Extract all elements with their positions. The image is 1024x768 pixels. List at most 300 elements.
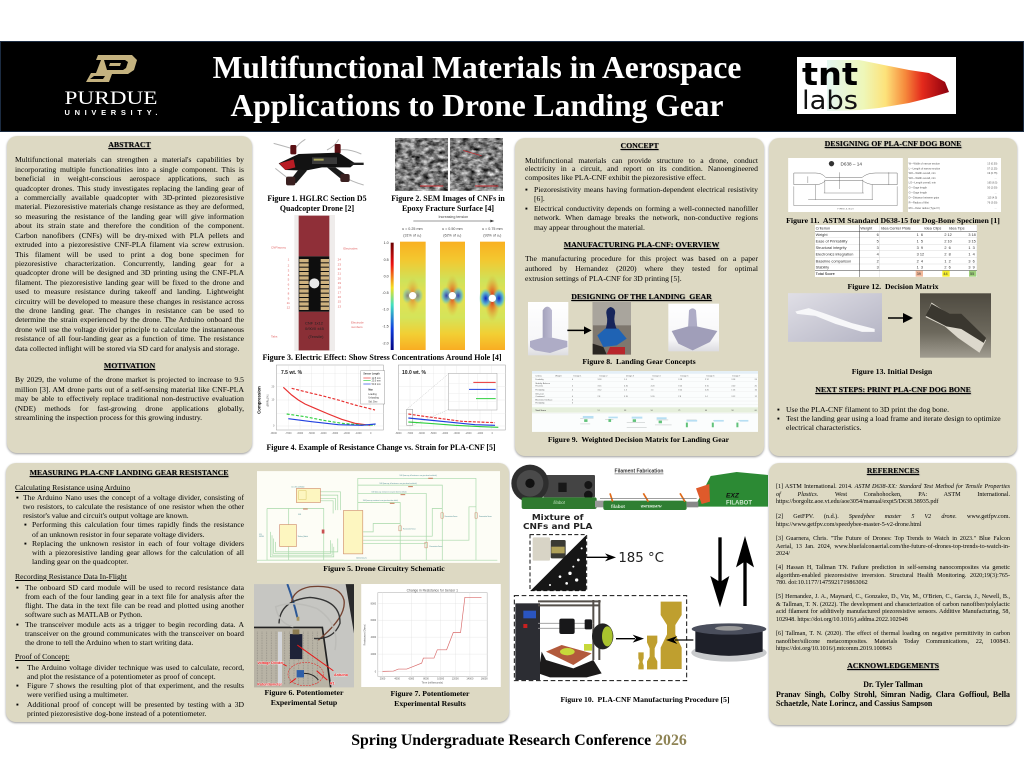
table: weighted decision matrix: Printability (535, 388, 544, 391)
heading: acknowledgements: ACKNOWLEDGEMENTS (847, 661, 939, 670)
bullets: recording resistance: The onboard SD card module will be used to record resistance data (25, 582, 244, 592)
chart: resistance change 7.5 wt percent: -7000 (285, 432, 292, 435)
bullets: proof of concept: were verified using a multimeter. (27, 690, 128, 699)
figure: PLA-CNF manufacturing procedure: CNFs and PLA (523, 522, 593, 531)
chart: resistance change 7.5 wt percent: 7.5 wt. % (281, 370, 303, 376)
chart: stress contour strips: (31% of u₁) (403, 234, 421, 238)
chart: potentiometer experimental results: 4000 (394, 678, 400, 681)
table: weighted decision matrix: 4 20 (731, 386, 736, 388)
chart: resistance change 7.5 wt percent: 10 (272, 399, 275, 402)
bullets: calculating resistance: The Arduino Nano uses the concept of a voltage divider, consisting of (23, 492, 244, 502)
heading: measuring resistance: MEASURING PLA-CNF LANDING GEAR RESISTANCE (30, 468, 228, 477)
photo: potentiometer experimental setup (254, 584, 354, 688)
bullets: calculating resistance: Replacing the unknown resistor in each of four voltage dividers (32, 539, 244, 548)
text: abstract: incorporating multiple functionalities into a single component. This is (15, 165, 244, 174)
table: ASTM specimen dimensions: 57 (2.25) (987, 167, 998, 170)
text: reference 2: https://www.getfpv.com/speedybee-master-5-v2-drone.html (776, 522, 921, 528)
bullets: next steps: Test the landing gear using a load frame and iterate design to optimize (786, 414, 1001, 423)
text: reference 3: 2024/ (776, 551, 790, 557)
table: weighted decision matrix: 5 (572, 386, 574, 388)
photo: specimen with electrodes: 19 (338, 281, 341, 285)
chart: stress contour strips: u = 0.75 mm (482, 227, 503, 231)
bullets: calculating resistance: Performing this calculation four times rapidly finds the resistance (32, 520, 244, 529)
table: ASTM specimen dimensions: RO—Outer radius (Type IV) (909, 207, 940, 210)
table: decision matrix: 3 12 (917, 253, 924, 257)
chart: resistance change 7.5 wt percent: Sensor Length (363, 372, 380, 375)
figure caption 2 (391, 194, 505, 213)
table: weighted decision matrix: Design 3 (626, 375, 635, 377)
chart: stress contour strips: (62% of u₁) (443, 234, 461, 238)
text: reference 5: 102948. https://doi.org/10.1016/j.addma.2022.102948 (776, 617, 908, 623)
chart: potentiometer experimental results: 2000 (371, 653, 377, 656)
extruder: filabot (611, 504, 625, 509)
bullets: concept: ▪ (525, 184, 528, 194)
text: reference 5: [5] Hernandez, J. A., Maynard, C., Gonzalez, D., Viz, M., O'Brien, C., Garcia, J., Newell, B., (776, 594, 1010, 600)
table: ASTM specimen dimensions: R—Radius of fillet (909, 201, 929, 204)
chart: resistance change 10.0 wt percent: -6000 (418, 432, 425, 435)
panel: designing dog bone and next steps (769, 138, 1017, 456)
table: ASTM specimen dimensions: ... (995, 191, 997, 194)
text: abstract: resistance of all four-landing gear as a function of time. The resistance (15, 334, 244, 343)
figure caption 13: Figure 13. Initial Design (852, 367, 932, 376)
table: ASTM specimen dimensions: 76 (3.00) (987, 201, 998, 204)
text: abstract: data collected inflight will be stored via SD card for analysis and storage. (15, 344, 239, 353)
table: ASTM specimen dimensions: G—Gage length (909, 187, 927, 190)
text: motivation: million [3]. AM drone parts out of a self-sensing material like CNF-PLA (15, 385, 244, 394)
text: reference 4: algorithm-enabled piezoresistive inversion. Structural Health Monitoring. 2020;19(3):765- (776, 573, 1010, 579)
filament spool (691, 623, 767, 662)
figure: landing gear concepts (528, 302, 719, 356)
photo: specimen with electrodes: 7 (288, 287, 290, 291)
text: abstract: This filament will be used to print a dog bone specimen for (15, 250, 244, 259)
table: decision matrix: 3 18 (968, 233, 976, 237)
table: weighted decision matrix: 3 15 (678, 386, 683, 388)
title: Multifunctional Materials in Aerospace (213, 50, 741, 85)
logo: tnt labs: tnt (802, 57, 858, 93)
photo: specimen with electrodes: 17 (338, 290, 341, 294)
photo: specimen with electrodes: 8 (288, 292, 290, 296)
bullets: calculating resistance: of an unknown resistor in four separate voltage dividers. (32, 530, 205, 538)
chart: potentiometer experimental results: 4000 (371, 636, 377, 639)
figure: drone circuitry schematic: Arduino-Nano-3.x (356, 557, 367, 560)
table: weighted decision matrix: 2 8 (597, 396, 601, 398)
table: weighted decision matrix: 3 15 (597, 386, 602, 388)
table: decision matrix: 3 6 (968, 259, 975, 263)
chart: stress contour strips: -1.5 (382, 325, 389, 329)
bullets: concept: [6]. (534, 194, 545, 203)
table: weighted decision matrix: 4 20 (651, 386, 655, 388)
figure caption 1 (267, 194, 367, 213)
text: abstract: quadcopter drones. This study investigates replacing the landing gear of (15, 184, 244, 193)
figure: drone circuitry schematic: Piezoresistive Sensor (430, 545, 443, 548)
figure caption 7 (390, 689, 470, 708)
chart: resistance change 7.5 wt percent: -1000 (355, 432, 362, 435)
table: decision matrix: Idea Center Plate (881, 226, 911, 230)
table: decision matrix: 3 (877, 266, 879, 270)
figure: drone circuitry schematic: 3.3V (259, 534, 262, 536)
figure: printed dog bone photo (920, 293, 991, 358)
label: filament fabrication: Filament Fabrication (615, 469, 663, 475)
bullets: concept (525, 184, 758, 232)
text: abstract: circuitry will be developed to measure these changes in resistance across (15, 297, 244, 306)
text: concept: composites like PLA-CNF exhibit the piezoresistive effect. (525, 173, 706, 182)
bullets: calculating resistance: ▪ (16, 492, 19, 502)
chart: resistance change 10.0 wt percent: 0 (492, 432, 494, 435)
table: weighted decision matrix: 24 (755, 379, 758, 381)
chart: potentiometer experimental results: 6000 (409, 678, 415, 681)
photo: specimen with electrodes: 15 (338, 300, 341, 304)
text: concept: Multifunctional materials can provide structure to a drone, conduct (525, 156, 758, 164)
bullets: calculating resistance: landing gear on the quadcopter. (32, 557, 128, 566)
bullets: calculating resistance: resistor's value and circuit's output voltage are known. (23, 511, 189, 520)
chart: resistance change 7.5 wt percent: -6000 (297, 432, 304, 435)
bullets: next steps: electrical characteristics. (786, 423, 862, 432)
bullets: proof of concept: ▪ (16, 662, 19, 672)
figure: initial design render (788, 293, 882, 342)
chart: resistance change 10.0 wt percent: 10.0 wt. % (402, 370, 426, 376)
table: ASTM specimen dimensions: ... (995, 207, 997, 210)
table: weighted decision matrix: 1 16 (731, 389, 736, 391)
bullets: concept: ▪ (525, 204, 528, 212)
table: ASTM specimen dimensions (908, 158, 1001, 212)
figure caption 6 (264, 688, 344, 707)
heading: concept: CONCEPT (620, 141, 659, 150)
bullets: proof of concept: printed piezoresistive dog-bone instead of a potentiometer. (27, 709, 206, 718)
table: decision matrix: Electronics integration (816, 253, 853, 257)
table: weighted decision matrix: 2 12 (705, 379, 709, 381)
bullets: recording resistance (16, 582, 244, 647)
photo: specimen with electrodes: 12 (287, 306, 290, 310)
table: ASTM specimen dimensions: G—Gage length (909, 191, 927, 194)
text: manufacturing overview: extrusion settings of PLA-CNF for 3D printing [5]. (525, 274, 682, 283)
bullets: proof of concept: Additional proof of concept will be presented by testing with a 3D (27, 700, 244, 709)
photo: specimen with electrodes: 23 (338, 262, 341, 266)
bullets: proof of concept: Figure 7 shows the resulting plot of that experiment, and the results (27, 681, 244, 690)
table: decision matrix: 1 6 (917, 233, 923, 237)
text: motivation (15, 375, 244, 422)
chart: resistance change 7.5 wt percent: 0 (273, 425, 275, 428)
photo: specimen with electrodes: 21 (338, 272, 341, 276)
bullets: recording resistance: transceiver on the ground communicates with the transceiver on board (25, 629, 244, 638)
header banner (0, 41, 1024, 132)
icon: quadcopter drone photo (274, 139, 364, 186)
table: weighted decision matrix: 50 (651, 410, 654, 412)
table: decision matrix: 3 15 (968, 239, 976, 243)
bullets: proof of concept: ▪ (16, 700, 19, 709)
figure: ASTM D638 drawing: D638 – 14 (840, 161, 862, 166)
table: decision matrix (815, 225, 977, 277)
photo: specimen with electrodes: 0/90/0 ±45 (305, 326, 325, 331)
text: manufacturing overview: authored by Hernandez (2020) where they tested for optimal (525, 264, 758, 273)
chart: stress contour strips: u = 0.25 mm (402, 227, 423, 231)
chart: potentiometer experimental results: 16000 (481, 678, 488, 681)
table: weighted decision matrix: 1 6 (651, 379, 654, 381)
text: concept: electricity in a circuit, and report on its condition. Nanoengineered (525, 164, 758, 173)
chart: potentiometer experimental results: 14000 (466, 678, 474, 681)
bullets: proof of concept: ▪ (16, 681, 19, 690)
figure caption 5: Figure 5. Drone Circuitry Schematic (323, 564, 445, 573)
chart: resistance change 10.0 wt percent: -5000 (430, 432, 437, 435)
table: weighted decision matrix: Design 6 (706, 375, 715, 377)
photo: potentiometer experimental setup: R1 (330, 682, 335, 686)
text: abstract: extruded into a piezoresistive CNF-PLA filament via screw extrusion. (15, 240, 244, 249)
photo: specimen with electrodes: numbers (351, 325, 363, 329)
bullets: next steps (777, 404, 1001, 432)
chart: resistance change 10.0 wt percent: -4000 (442, 432, 449, 435)
text: reference 2: [2] GetFPV. (n.d.). Speedybee master 5 V2 drone. www.getfpv.com. (776, 514, 1010, 520)
figure caption 11: Figure 11. ASTM Standard D638-15 for Dog-Bone Specimen [1] (786, 216, 1000, 225)
chart: potentiometer experimental results (361, 584, 501, 687)
text: abstract: used to measure resistance during takeoff and landing. Lightweight (15, 287, 244, 296)
arrow up (736, 536, 754, 606)
figure caption 1: Figure 1. HGLRC Section D5 (267, 194, 367, 203)
chart: potentiometer experimental results: 12000 (452, 678, 459, 681)
chart: resistance change 7.5 wt percent: Unloading (368, 397, 380, 399)
chart: potentiometer experimental results: 8000 (423, 678, 429, 681)
chart: resistance change 7.5 wt percent: 12.5 mm (372, 378, 381, 380)
table: weighted decision matrix: Design 4 (653, 375, 661, 377)
bullets: recording resistance: The transceiver module acts as a trigger to begin recording data. A (25, 620, 244, 628)
table: ASTM specimen dimensions: 50 (2.00) (987, 187, 998, 190)
table: weighted decision matrix: Design 1 (574, 375, 581, 377)
text: reference 3: [3] Guarnera, Chris. "The Future of Drones: Top Trends to Watch in 2023." Blue Falcon (776, 536, 1010, 542)
chart: potentiometer experimental results: Time (milliseconds) (422, 682, 443, 685)
3D printer (514, 596, 687, 681)
figure: drone circuitry schematic (257, 471, 500, 563)
figure: drone circuitry schematic: Piezoresistive Sensor (403, 528, 416, 531)
text: abstract: quadcopter drone will be designed and 3D printing using the CNF-PLA (15, 268, 244, 277)
chart: resistance change 10.0 wt percent: -3000 (453, 432, 460, 435)
panel: references and acknowledgements (769, 463, 1016, 725)
photo: specimen with electrodes: 9 (288, 296, 290, 300)
text: reference 1: of Plastics. West Conshohocken, PA: ASTM International. (776, 492, 1010, 498)
bullets: calculating resistance: two resistors, to calculate the resistance of one resistor when the other (23, 502, 244, 511)
text: reference 4 (776, 564, 1010, 586)
chart: stress contour strips: (93% of u₁) (483, 234, 501, 238)
text: motivation: streamlining the inspection process for this growing industry. (15, 413, 202, 422)
text: abstract: Carbon nanofibers (CNFs) will be dry-mixed with PLA pellets and (15, 231, 244, 240)
bullets: next steps: ▪ (777, 414, 780, 423)
subheading: calculating resistance: Calculating Resistance using Arduino (15, 483, 130, 492)
table: decision matrix: 2 8 (944, 253, 951, 257)
chart: potentiometer experimental results: 6000 (371, 619, 377, 622)
chart: resistance change 10.0 wt percent: -2000 (465, 432, 472, 435)
table: decision matrix: 3 (877, 246, 879, 250)
figure caption 1: Quadcopter Drone [2] (280, 204, 354, 213)
figure: drone circuitry schematic: 100K (298, 514, 301, 516)
panel: concept and manufacturing overview (515, 138, 764, 456)
text: abstract: so measuring the resistance of the landing gear will give information (15, 212, 244, 221)
chart: resistance change 7.5 wt percent: Std. Dev. (368, 400, 378, 403)
figure caption 10: Figure 10. PLA-CNF Manufacturing Procedure [5] (560, 695, 730, 704)
figure: drone circuitry schematic: LM2596 (259, 536, 264, 538)
table: decision matrix: Total Score (816, 272, 835, 276)
table: weighted decision matrix: Criteria (535, 374, 543, 377)
table: decision matrix: 1 5 (917, 239, 923, 243)
panel: abstract and motivation (7, 136, 252, 453)
logo: tnt labs (797, 57, 956, 114)
figure: drone circuitry schematic: 100K (lower-cap; resistance to use given drone bus default) (371, 490, 407, 493)
bullets: next steps: ▪ (777, 404, 780, 414)
table: weighted decision matrix: 3 12 (731, 396, 735, 398)
table: decision matrix: 1 4 (968, 253, 976, 257)
table: ASTM specimen dimensions: ... (995, 177, 997, 180)
text: abstract: the drone landing gear. The changes in resistance can be used to (15, 306, 244, 315)
logo: Purdue University: PURDUE (64, 88, 158, 109)
arrow down (710, 537, 729, 607)
table: decision matrix: 44 (943, 272, 948, 276)
chart: resistance change 7.5 wt percent: 0 (370, 432, 372, 435)
heading: designing of the landing gear: DESIGNING OF THE LANDING GEAR (571, 292, 712, 301)
chart: stress contour strips: -2.0 (382, 342, 389, 346)
table: decision matrix: Criterion (816, 226, 830, 230)
heading: abstract: ABSTRACT (108, 140, 151, 149)
table: weighted decision matrix: 66 (705, 410, 708, 412)
table: weighted decision matrix: 1 4 (705, 396, 708, 398)
photo: potentiometer experimental setup: Arduino (334, 673, 349, 677)
chart: stress contour strips: Increasing tension (438, 215, 468, 219)
text: abstract: determine the strain experienced by the drone. The Arduino onboard the (15, 315, 244, 324)
figure: drone circuitry schematic: 100K (lower-cap; fall resistance or use given drone bus default) (380, 482, 417, 485)
table: weighted decision matrix: 5 20 (705, 389, 710, 391)
chart: stress contour strips: 1.0 (384, 241, 389, 245)
chart: potentiometer experimental results: Resistance (Ohms) (364, 624, 367, 645)
chart: resistance change 10.0 wt percent (395, 364, 506, 435)
chart: potentiometer experimental results: Change in Resistance for Sensor 1 (407, 588, 458, 592)
text: abstract: about its strain state and therefore the condition of the component. (15, 221, 244, 230)
chart: resistance change 10.0 wt percent: -8000 (395, 432, 402, 435)
table: weighted decision matrix: 5 20 (624, 396, 629, 398)
table: decision matrix: 2 6 (944, 266, 951, 270)
text: reference 4: [4] Hassan H, Tallman TN. Failure prediction in self-sensing nanocomposites via genetic (776, 565, 1010, 571)
title (213, 50, 741, 123)
photo: specimen with electrodes: 22 (338, 267, 341, 271)
table: weighted decision matrix: 5 20 (651, 396, 655, 398)
bullets: recording resistance: software such as MATLAB or Python. (25, 610, 143, 619)
text: reference 5: acid filament for additively manufactured piezoresistive sensors. Additive Manufacturing, 58, (776, 609, 1010, 615)
table: weighted decision matrix: Total Score (535, 409, 547, 412)
table: decision matrix: 4 (877, 253, 880, 257)
table: weighted decision matrix: Prevents (535, 385, 543, 388)
chart: potentiometer experimental results: 8000 (371, 602, 377, 605)
photo: specimen with electrodes: CNF/epoxy (271, 246, 287, 250)
arrow: spool to specimens (666, 636, 693, 644)
figure caption 12: Figure 12. Decision Matrix (847, 282, 939, 291)
table: weighted decision matrix: 3 (572, 403, 574, 405)
text: reference 2 (776, 514, 1010, 528)
table: weighted decision matrix: 71 (678, 410, 680, 412)
label: 185 C: 185 °C (618, 551, 664, 566)
figure: drone circuitry schematic: Piezoresistive Sensor (445, 515, 458, 518)
table: weighted decision matrix: Weight (555, 374, 562, 377)
table: weighted decision matrix: 16 (755, 389, 758, 391)
table: decision matrix: 55 (970, 272, 974, 276)
table: ASTM specimen dimensions: WO—Width overall, min (909, 172, 936, 175)
figure: drone circuitry schematic: 100K (lower-cap; fall resistance or use given drone bus default) (400, 474, 437, 477)
text: abstract: filament. The piezoresistive landing gear will be fixed to the drone and (15, 278, 244, 287)
photo: specimen with electrodes (271, 215, 364, 351)
table: weighted decision matrix: 3 18 (678, 379, 683, 381)
chart: potentiometer experimental results: 10000 (437, 678, 445, 681)
chart: stress contour strips: 0.0 (384, 274, 389, 278)
table: weighted decision matrix: Durability (535, 378, 544, 381)
photo: specimen with electrodes: 11 (287, 301, 290, 305)
heading: motivation: MOTIVATION (104, 361, 155, 370)
figure: PLA-CNF manufacturing procedure (510, 460, 768, 710)
text: reference 6 (776, 630, 1010, 652)
chart: resistance change 7.5 wt percent: 50.0 mm (372, 384, 381, 386)
chart: potentiometer experimental results: 2000 (380, 678, 386, 681)
chart: resistance change 7.5 wt percent: -3000 (332, 432, 339, 435)
bullets: concept: Electrical conductivity depends on forming a well-connected nanofiller (534, 204, 758, 212)
heading: next steps: NEXT STEPS: PRINT PLA-CNF DOG BONE (815, 385, 971, 394)
table: decision matrix: Idea Clips (924, 226, 941, 230)
table: weighted decision matrix (532, 371, 758, 432)
bullets: calculating resistance (16, 492, 244, 566)
table: weighted decision matrix: 3 12 (597, 389, 601, 391)
table: ASTM specimen dimensions: L—Length of narrow section (909, 167, 941, 170)
photo: specimen with electrodes: 18 (338, 286, 341, 290)
text: reference 6: https://doi.org/10.1016/j.mtcomm.2019.100843 (776, 646, 892, 652)
bullets: proof of concept: The Arduino voltage divider technique was used to calculate, record, (27, 662, 244, 672)
text: reference 4: 780. doi:10.1177/1475921719863062 (776, 580, 868, 586)
text: acknowledgements: Pranav Singh, Colby Strohl, Simran Nadig, Clara Goffioul, Bella (776, 690, 1010, 698)
figure: drone circuitry schematic: Wireless_Module (298, 535, 308, 538)
table: decision matrix: 2 6 (944, 246, 951, 250)
table: ASTM specimen dimensions: 13 (0.50) (987, 162, 998, 165)
text: reference 6: [6] Tallman, T. N. (2020). The effect of thermal loading on negative permittivity in carbon (776, 631, 1010, 637)
bullets: calculating resistance: ▪ (24, 539, 27, 548)
table: decision matrix: 3 9 (917, 246, 923, 250)
chart: stress contour strips: u = 0.50 mm (442, 227, 463, 231)
table: weighted decision matrix: 3 18 (731, 379, 736, 381)
photo: specimen with electrodes: 3 (288, 268, 290, 272)
table: decision matrix: 39 (917, 272, 921, 276)
figure: ASTM D638 drawing (788, 158, 903, 212)
table: weighted decision matrix: 20 (755, 386, 758, 388)
text: concept (525, 156, 758, 182)
photo: potentiometer experimental setup: Potentiometer (257, 682, 282, 686)
arrow to temperature (587, 553, 616, 561)
bullets: concept: network. When damage breaks the network, non-conductive regions (534, 213, 758, 222)
photo: specimen with electrodes: (Tensile) (308, 334, 324, 339)
chart: resistance change 7.5 wt percent: 20 (272, 385, 275, 388)
heading: manufacturing overview: MANUFACTURING PLA-CNF: OVERVIEW (564, 240, 719, 249)
text: abstract: Multifunctional materials can strengthen a material's capabilities by (15, 155, 244, 164)
table: decision matrix: Ease of Printability (816, 239, 847, 243)
table: weighted decision matrix: Design 5 (681, 375, 689, 377)
chart: resistance change 7.5 wt percent: ΔR/R₀ [%] (265, 394, 269, 407)
table: decision matrix: Weight (816, 233, 828, 237)
bullets: proof of concept (16, 662, 244, 718)
text: abstract: piezoresistive characterization. Concurrently, landing gear for a (15, 259, 244, 268)
table: weighted decision matrix: 58 (624, 410, 627, 412)
bullets: concept: Piezoresistivity means having formation-dependent electrical resistivity (534, 184, 758, 194)
table: ASTM specimen dimensions: W—Width of narrow section (909, 162, 940, 165)
table: ASTM specimen dimensions: D—Distance between grips (909, 196, 940, 199)
bullets: recording resistance: from each of the four landing gear in a text file for analysis after the (25, 592, 244, 601)
table: weighted decision matrix: 60 (755, 410, 758, 412)
figure caption 6: Figure 6. Potentiometer (265, 688, 343, 697)
subheading: proof of concept: Proof of Concept: (15, 652, 70, 661)
table: weighted decision matrix: 1 6 (624, 379, 628, 381)
photo: potentiometer experimental setup: Voltage Divider (257, 661, 284, 665)
text: acknowledgements: Schaetzle, Nate Lorincz, and Cassius Sampson (776, 699, 932, 708)
label: mixture of CNFs and PLA: Mixture of (532, 513, 584, 522)
bullets: recording resistance: ▪ (16, 582, 19, 592)
text: acknowledgements (776, 680, 1010, 708)
table: weighted decision matrix: 3 12 (678, 389, 682, 391)
